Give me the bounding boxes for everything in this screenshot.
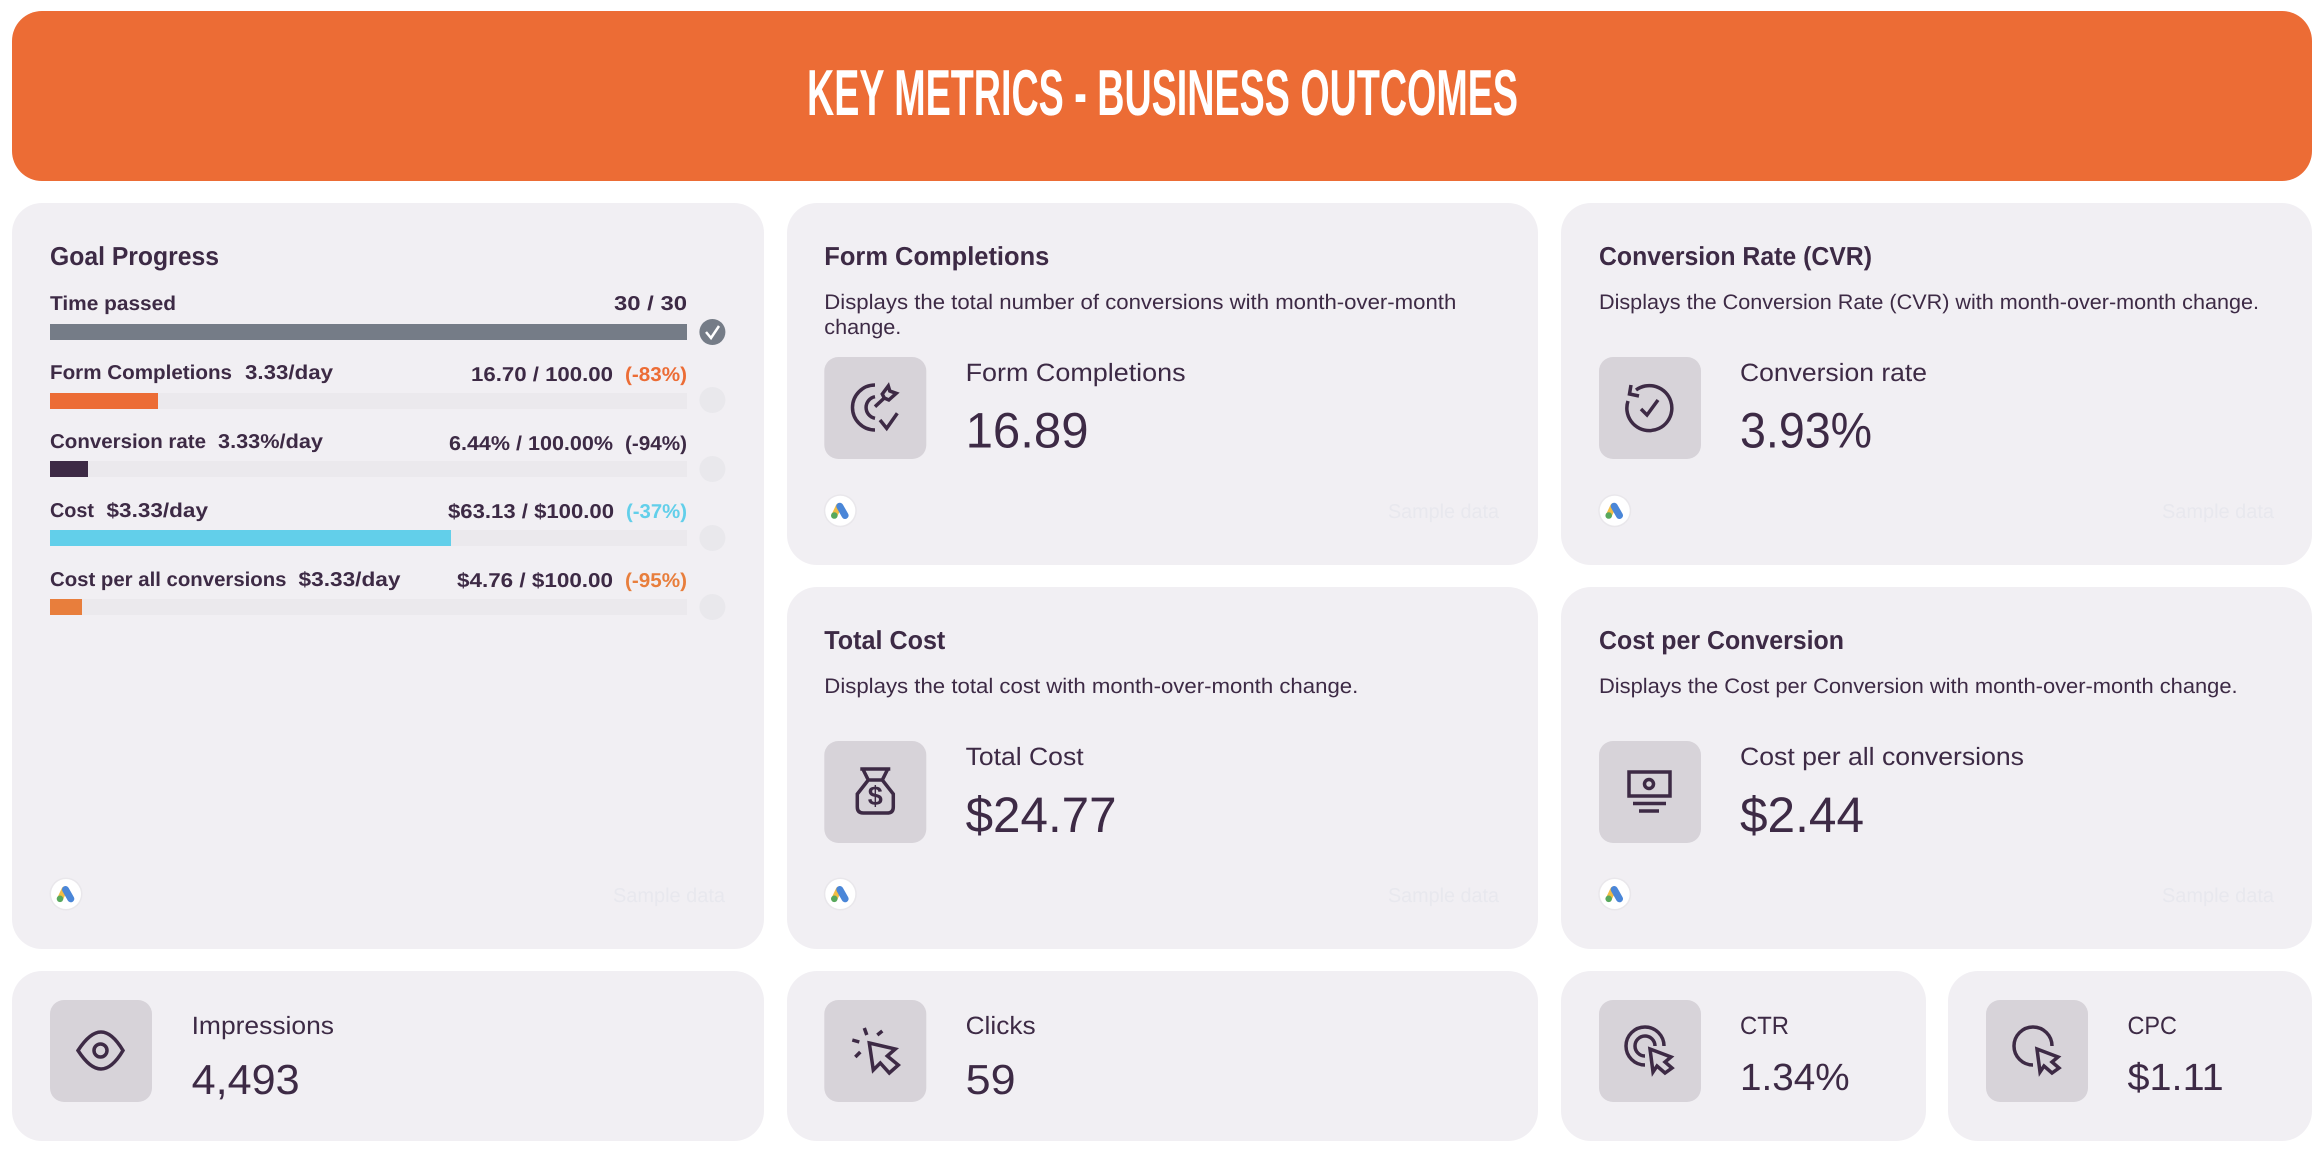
heading: Form Completions [824, 241, 1049, 271]
metric label: Impressions [192, 1012, 334, 1040]
metric value: 1.34% [1740, 1057, 1850, 1099]
icon: arc cursor [1986, 1000, 2088, 1102]
row: conversion rate: 3.33%/day [218, 431, 324, 453]
icon: google ads logo [1598, 494, 1631, 527]
panel: clicks [787, 971, 1538, 1141]
row: time passed: Time passed [50, 293, 176, 315]
sample data note: Sample data [613, 885, 726, 907]
row: cost per all conversions: (-95%) [625, 570, 687, 592]
sample data note: Sample data [2162, 501, 2275, 523]
icon: google ads logo [824, 878, 857, 910]
metric label: Clicks [966, 1012, 1036, 1040]
description: Displays the total number of conversions with month-over-month [824, 291, 1456, 314]
row: cost per all conversions: $4.76 / $100.00 [457, 570, 613, 592]
row: form completions: Form Completions [50, 362, 232, 384]
metric value: $1.11 [2128, 1057, 2224, 1099]
heading: Conversion Rate (CVR) [1599, 241, 1872, 271]
panel: impressions [12, 971, 764, 1141]
row: form completions: 16.70 / 100.00 [471, 364, 613, 386]
metric value: 16.89 [966, 403, 1089, 459]
metric value: 59 [966, 1056, 1016, 1103]
description: Displays the Conversion Rate (CVR) with month-over-month change. [1599, 291, 2259, 314]
panel: cpc [1948, 971, 2312, 1141]
metric value: $2.44 [1740, 787, 1864, 843]
icon: eye [50, 1000, 152, 1102]
icon: money bag [824, 741, 926, 843]
description: Displays the Cost per Conversion with month-over-month change. [1599, 675, 2238, 698]
metric label: CTR [1740, 1012, 1789, 1040]
row: form completions: 3.33/day [245, 362, 334, 384]
row: cost per all conversions [50, 569, 725, 620]
metric value: 3.93% [1740, 403, 1872, 459]
icon: target cursor [1599, 1000, 1701, 1102]
metric label: Cost per all conversions [1740, 743, 2024, 771]
row: cost: $63.13 / $100.00 [448, 501, 614, 523]
icon: target with arrow and check [824, 357, 926, 459]
icon: google ads logo [1598, 878, 1631, 910]
metric label: Conversion rate [1740, 359, 1927, 387]
header banner [12, 11, 2312, 181]
panel: cost per conversion [1561, 587, 2312, 949]
metric value: $24.77 [966, 787, 1117, 843]
row: cost: Cost [50, 500, 94, 522]
description: change. [824, 316, 901, 339]
row: cost: (-37%) [626, 501, 687, 523]
row: cost [50, 500, 725, 551]
icon: google ads logo [824, 494, 857, 527]
icon: monitor [1599, 741, 1701, 843]
row: conversion rate: (-94%) [625, 433, 687, 455]
metric label: Total Cost [966, 743, 1084, 771]
row: conversion rate [50, 431, 725, 482]
sample data note: Sample data [1388, 501, 1500, 523]
metric label: CPC [2128, 1012, 2177, 1040]
row: time passed [50, 293, 725, 345]
row: cost per all conversions: Cost per all conversions [50, 569, 286, 591]
icon: cursor click [824, 1000, 926, 1102]
panel: total cost [787, 587, 1538, 949]
sample data note: Sample data [2162, 885, 2275, 907]
sample data note: Sample data [1388, 885, 1500, 907]
row: form completions [50, 362, 725, 413]
panel: conversion rate [1561, 203, 2312, 565]
row: cost per all conversions: $3.33/day [298, 569, 401, 591]
heading: goal progress: Goal Progress [50, 241, 219, 271]
panel: goal progress [12, 203, 764, 949]
row: cost: $3.33/day [106, 500, 209, 522]
panel: form completions [787, 203, 1538, 565]
heading: Cost per Conversion [1599, 625, 1844, 655]
metric label: Form Completions [966, 359, 1186, 387]
row: time passed: 30 / 30 [614, 293, 687, 315]
icon: money bag: $ [868, 781, 883, 811]
title: KEY METRICS - BUSINESS OUTCOMES [807, 56, 1518, 129]
metric value: 4,493 [192, 1056, 300, 1103]
panel: ctr [1561, 971, 1926, 1141]
description: Displays the total cost with month-over-month change. [824, 675, 1358, 698]
icon: google ads logo [50, 878, 82, 910]
icon: refresh check [1599, 357, 1701, 459]
row: conversion rate: 6.44% / 100.00% [449, 433, 613, 455]
heading: Total Cost [824, 625, 946, 655]
description [824, 291, 1456, 339]
row: form completions: (-83%) [625, 364, 687, 386]
row: conversion rate: Conversion rate [50, 431, 206, 453]
